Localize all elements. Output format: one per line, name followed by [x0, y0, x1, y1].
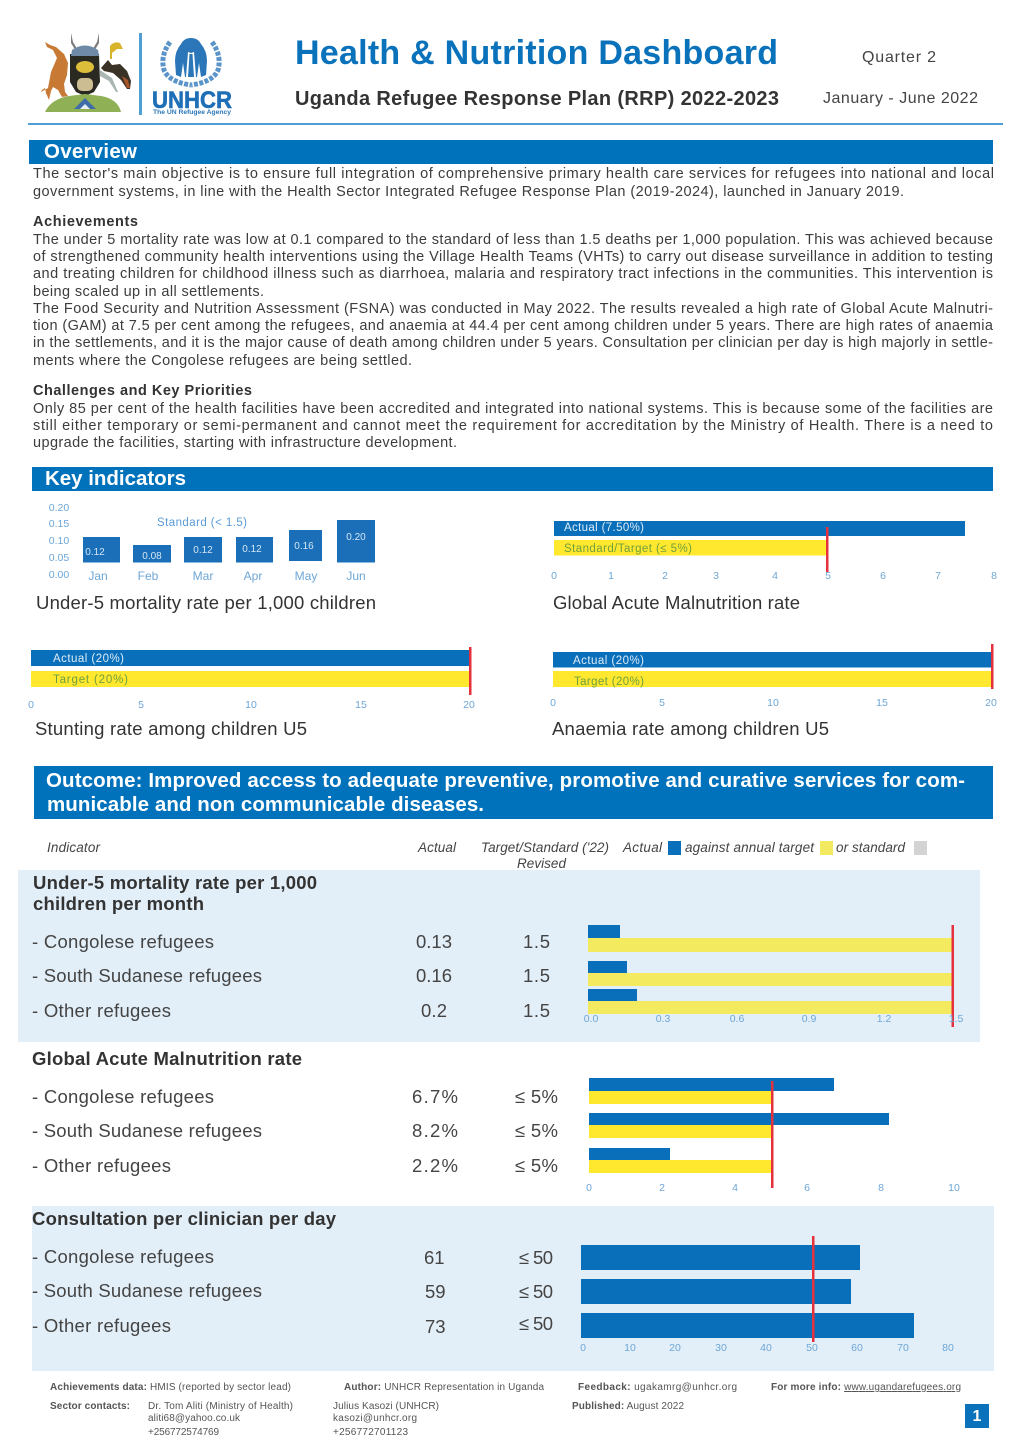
bar chart: 1.5: [949, 1013, 963, 1025]
key indicators heading: Key indicators: [45, 467, 186, 490]
subtitle: Uganda Refugee Response Plan (RRP) 2022-2023: [295, 88, 779, 110]
achievements text: of strengthened community health interventions using the Village Health Teams (VHTs) to carry out disease surveillance in addition to testing: [33, 249, 993, 265]
bar chart: global acute malnutrition: 0: [551, 570, 557, 582]
footer: sector contacts: +256772574769: [148, 1427, 219, 1438]
bar chart: global acute malnutrition: Actual (7.50%): [564, 522, 644, 534]
bar chart: 20: [669, 1342, 681, 1354]
bar chart: anaemia: 15: [876, 697, 888, 709]
footer: sector contacts: Sector contacts:: [50, 1401, 130, 1412]
bar chart: under-5 mortality: Standard (< 1.5): [157, 517, 247, 529]
achievements text: being scaled up in all settlements.: [33, 284, 264, 300]
period label: January - June 2022: [823, 90, 978, 107]
challenges text: upgrade the facilities, starting with infrastructure development.: [33, 435, 457, 451]
table header and legend: [47, 840, 927, 871]
bar chart: under-5 mortality: 0.20: [346, 532, 366, 543]
rows: ≤ 50: [519, 1313, 553, 1334]
bar chart: anaemia: [550, 644, 997, 709]
footer: sources: Feedback: ugakamrg@unhcr.org: [578, 1382, 737, 1393]
bar chart: 6: [804, 1182, 810, 1194]
rows: 1.5: [523, 965, 550, 986]
footer: sector contacts: [50, 1401, 684, 1438]
row heading: Global Acute Malnutrition rate: [32, 1048, 302, 1069]
bar chart: 10: [624, 1342, 636, 1354]
bar chart: global acute malnutrition: 8: [991, 570, 997, 582]
bar chart: 0.9: [802, 1013, 816, 1025]
table header and legend: Actual: [622, 840, 663, 855]
rows: - Other refugees: [32, 1000, 171, 1021]
bar chart: under-5 mortality: 0.08: [142, 551, 162, 562]
row heading: Under-5 mortality rate per 1,000: [33, 872, 317, 893]
outcome banner: Outcome: Improved access to adequate preventive, promotive and curative services for com-: [46, 769, 965, 792]
bar chart: 80: [942, 1342, 954, 1354]
chart title: under-5 mortality: Under-5 mortality rate per 1,000 children: [36, 592, 376, 613]
panel: under-5 mortality rate: [18, 870, 980, 1042]
rows: - Congolese refugees: [32, 931, 214, 952]
challenges text: still either temporary or semi-permanent and cannot meet the requirement for accreditation by the Ministry of Health. There is a need to: [33, 418, 993, 434]
footer: [50, 1382, 989, 1438]
bar chart: 4: [732, 1182, 738, 1194]
bar chart: under-5 mortality: Apr: [244, 569, 262, 583]
icon: UNHCR emblem and wordmark: UNHCR: [152, 87, 232, 114]
bar chart: under-5 mortality: 0.16: [294, 541, 314, 552]
bar chart: stunting: 0: [28, 699, 34, 711]
rows: 0.2: [421, 1000, 447, 1021]
bar chart: under-5 mortality: 0.10: [49, 535, 69, 547]
achievements text: in the settlements, and it is the major cause of death among children under 5 years. Consultation per clinician per day is high majorly in settle-: [33, 335, 993, 351]
footer: sector contacts: Julius Kasozi (UNHCR): [333, 1401, 439, 1412]
rows: 73: [425, 1316, 446, 1337]
key indicators heading: [32, 467, 993, 491]
rows: 59: [425, 1281, 446, 1302]
bar chart: 40: [760, 1342, 772, 1354]
bar chart: 10: [948, 1182, 960, 1194]
chart title: anaemia: Anaemia rate among children U5: [552, 718, 829, 739]
bar chart: anaemia: 5: [659, 697, 665, 709]
row heading: [33, 872, 317, 914]
bar chart: global acute malnutrition: [551, 521, 997, 582]
bar chart: global acute malnutrition: 4: [772, 570, 778, 582]
rows: ≤ 50: [519, 1281, 553, 1302]
bar chart: under-5 mortality: 0.05: [49, 552, 69, 564]
table header and legend: or standard: [836, 840, 905, 855]
bar chart: stunting: Actual (20%): [53, 653, 124, 665]
rows: 1.5: [523, 1000, 550, 1021]
outcome banner: [34, 766, 993, 819]
icon: UNHCR emblem and wordmark: [152, 38, 232, 116]
footer: sources: [50, 1382, 961, 1393]
rows: 0.16: [416, 965, 452, 986]
rows: 6.7%: [412, 1086, 458, 1107]
table header and legend: against annual target: [685, 840, 815, 855]
bar chart: global acute malnutrition: 1: [608, 570, 614, 582]
rows: 0.13: [416, 931, 452, 952]
bar chart: global acute malnutrition: 3: [713, 570, 719, 582]
bar chart: stunting: 5: [138, 699, 144, 711]
icon: UNHCR emblem and wordmark: The UN Refugee Agency: [153, 110, 232, 116]
rows: - Congolese refugees: [32, 1086, 214, 1107]
rows: [32, 1086, 558, 1176]
bar chart: under-5 mortality: [49, 502, 375, 583]
overview text: The sector's main objective is to ensure full integration of comprehensive primary health care services for refugees into national and local: [33, 166, 994, 182]
bar chart: under-5 mortality: Feb: [138, 569, 159, 583]
table header and legend: Actual: [417, 840, 457, 855]
table header and legend: Target/Standard ('22): [481, 840, 609, 855]
row heading: children per month: [33, 893, 204, 914]
bar chart: 0.3: [656, 1013, 670, 1025]
footer: sources: For more info: www.ugandarefugees.org: [771, 1382, 961, 1393]
bar chart: stunting: [28, 647, 475, 711]
footer: sector contacts: aliti68@yahoo.co.uk: [148, 1413, 241, 1424]
rows: 2.2%: [412, 1155, 458, 1176]
bar chart: [584, 925, 963, 1027]
bar chart: under-5 mortality: 0.12: [85, 547, 105, 558]
bar chart: under-5 mortality: 0.12: [242, 544, 262, 555]
rows: ≤ 50: [519, 1247, 553, 1268]
challenges text: Only 85 per cent of the health facilities have been accredited and integrated into national systems. This is because some of the facilities are: [33, 401, 993, 417]
panel: consultation per clinician per day: [32, 1206, 994, 1371]
achievements text: tion (GAM) at 7.5 per cent among the refugees, and anaemia at 44.4 per cent among children under 5 years. There are high rates of anaemia: [33, 318, 994, 334]
rows: - Other refugees: [32, 1155, 171, 1176]
bar chart: under-5 mortality: Jun: [346, 569, 366, 583]
bar chart: global acute malnutrition: 6: [880, 570, 886, 582]
title: Health & Nutrition Dashboard: [295, 34, 778, 72]
chart title: global acute malnutrition: Global Acute Malnutrition rate: [553, 592, 800, 613]
rows: - South Sudanese refugees: [32, 965, 262, 986]
bar chart: under-5 mortality: 0.00: [49, 569, 69, 581]
bar chart: under-5 mortality: 0.20: [49, 502, 69, 514]
header rule: [28, 123, 1003, 125]
bar chart: under-5 mortality: 0.12: [193, 545, 213, 556]
bar chart: [580, 1236, 954, 1354]
panel: overview: [29, 140, 994, 451]
bar chart: 70: [897, 1342, 909, 1354]
bar chart: global acute malnutrition: 7: [935, 570, 941, 582]
overview heading: Overview: [44, 140, 137, 163]
bar chart: global acute malnutrition: 5: [825, 570, 831, 582]
bar chart: stunting: 15: [355, 699, 367, 711]
bar chart: [586, 1078, 960, 1194]
bar chart: global acute malnutrition: 2: [662, 570, 668, 582]
rows: ≤ 5%: [515, 1120, 558, 1141]
bar chart: 1.2: [877, 1013, 891, 1025]
rows: [32, 931, 550, 1021]
rows: 8.2%: [412, 1120, 458, 1141]
bar chart: 0.0: [584, 1013, 598, 1025]
bar chart: 30: [715, 1342, 727, 1354]
rows: 61: [424, 1247, 445, 1268]
bar chart: 8: [878, 1182, 884, 1194]
challenges text: Challenges and Key Priorities: [33, 383, 252, 399]
quarter label: Quarter 2: [862, 49, 936, 66]
challenges text: [33, 383, 993, 451]
bar chart: stunting: 20: [463, 699, 475, 711]
bar chart: under-5 mortality: Mar: [193, 569, 213, 583]
bar chart: anaemia: Actual (20%): [573, 655, 644, 667]
page number: 1: [973, 1408, 982, 1425]
bar chart: 60: [851, 1342, 863, 1354]
achievements text: ments where the Congolese refugees are being settled.: [33, 353, 412, 369]
bar chart: global acute malnutrition: Standard/Target (≤ 5%): [564, 543, 692, 555]
bar chart: under-5 mortality: Jan: [88, 569, 108, 583]
table header and legend: Indicator: [47, 840, 100, 855]
bar chart: under-5 mortality: 0.15: [49, 518, 69, 530]
rows: - South Sudanese refugees: [32, 1120, 262, 1141]
bar chart: stunting: 10: [245, 699, 257, 711]
bar chart: anaemia: Target (20%): [574, 676, 644, 688]
footer: sources: Achievements data: HMIS (reported by sector lead): [50, 1382, 291, 1393]
achievements text: The under 5 mortality rate was low at 0.1 compared to the standard of less than 1.5 deaths per 1,000 population. This was achieved because: [33, 232, 993, 248]
rows: - Congolese refugees: [32, 1246, 214, 1267]
row heading: Consultation per clinician per day: [32, 1208, 337, 1229]
rows: - South Sudanese refugees: [32, 1280, 262, 1301]
bar chart: anaemia: 20: [985, 697, 997, 709]
overview text: [33, 166, 994, 200]
rows: ≤ 5%: [515, 1086, 558, 1107]
achievements text: The Food Security and Nutrition Assessment (FSNA) was conducted in May 2022. The results revealed a high rate of Global Acute Malnutri-: [33, 301, 993, 317]
bar chart: anaemia: 10: [767, 697, 779, 709]
rows: 1.5: [523, 931, 550, 952]
footer: sources: Author: UNHCR Representation in Uganda: [344, 1382, 544, 1393]
rows: [32, 1246, 553, 1337]
rows: ≤ 5%: [515, 1155, 558, 1176]
bar chart: 0: [580, 1342, 586, 1354]
table header and legend: Revised: [517, 856, 566, 871]
footer: sector contacts: +256772701123: [333, 1427, 408, 1438]
bar chart: stunting: Target (20%): [53, 674, 128, 686]
achievements text: and treating children for childhood illness such as diarrhoea, malaria and respiratory tract infections in the communities. This intervention is: [33, 266, 993, 282]
achievements text: [33, 214, 994, 369]
outcome banner: municable and non communicable diseases.: [47, 793, 484, 816]
bar chart: 50: [806, 1342, 818, 1354]
footer: sector contacts: Dr. Tom Aliti (Ministry of Health): [148, 1401, 293, 1412]
icon: Uganda coat of arms: [41, 33, 131, 112]
bar chart: 0: [586, 1182, 592, 1194]
bar chart: 2: [659, 1182, 665, 1194]
rows: - Other refugees: [32, 1315, 171, 1336]
achievements text: Achievements: [33, 214, 138, 230]
panel: global acute malnutrition rate: [32, 1048, 960, 1194]
chart title: stunting: Stunting rate among children U5: [35, 718, 307, 739]
page number: [965, 1404, 989, 1428]
overview heading: [29, 140, 993, 164]
footer: sector contacts: kasozi@unhcr.org: [333, 1413, 417, 1424]
overview text: government systems, in line with the Health Sector Integrated Refugee Response Plan (2019-2024), launched in January 2019.: [33, 184, 904, 200]
footer: sector contacts: Published: August 2022: [572, 1401, 684, 1412]
bar chart: under-5 mortality: May: [295, 569, 317, 583]
bar chart: 0.6: [730, 1013, 744, 1025]
divider between logos: [139, 33, 142, 115]
bar chart: anaemia: 0: [550, 697, 556, 709]
